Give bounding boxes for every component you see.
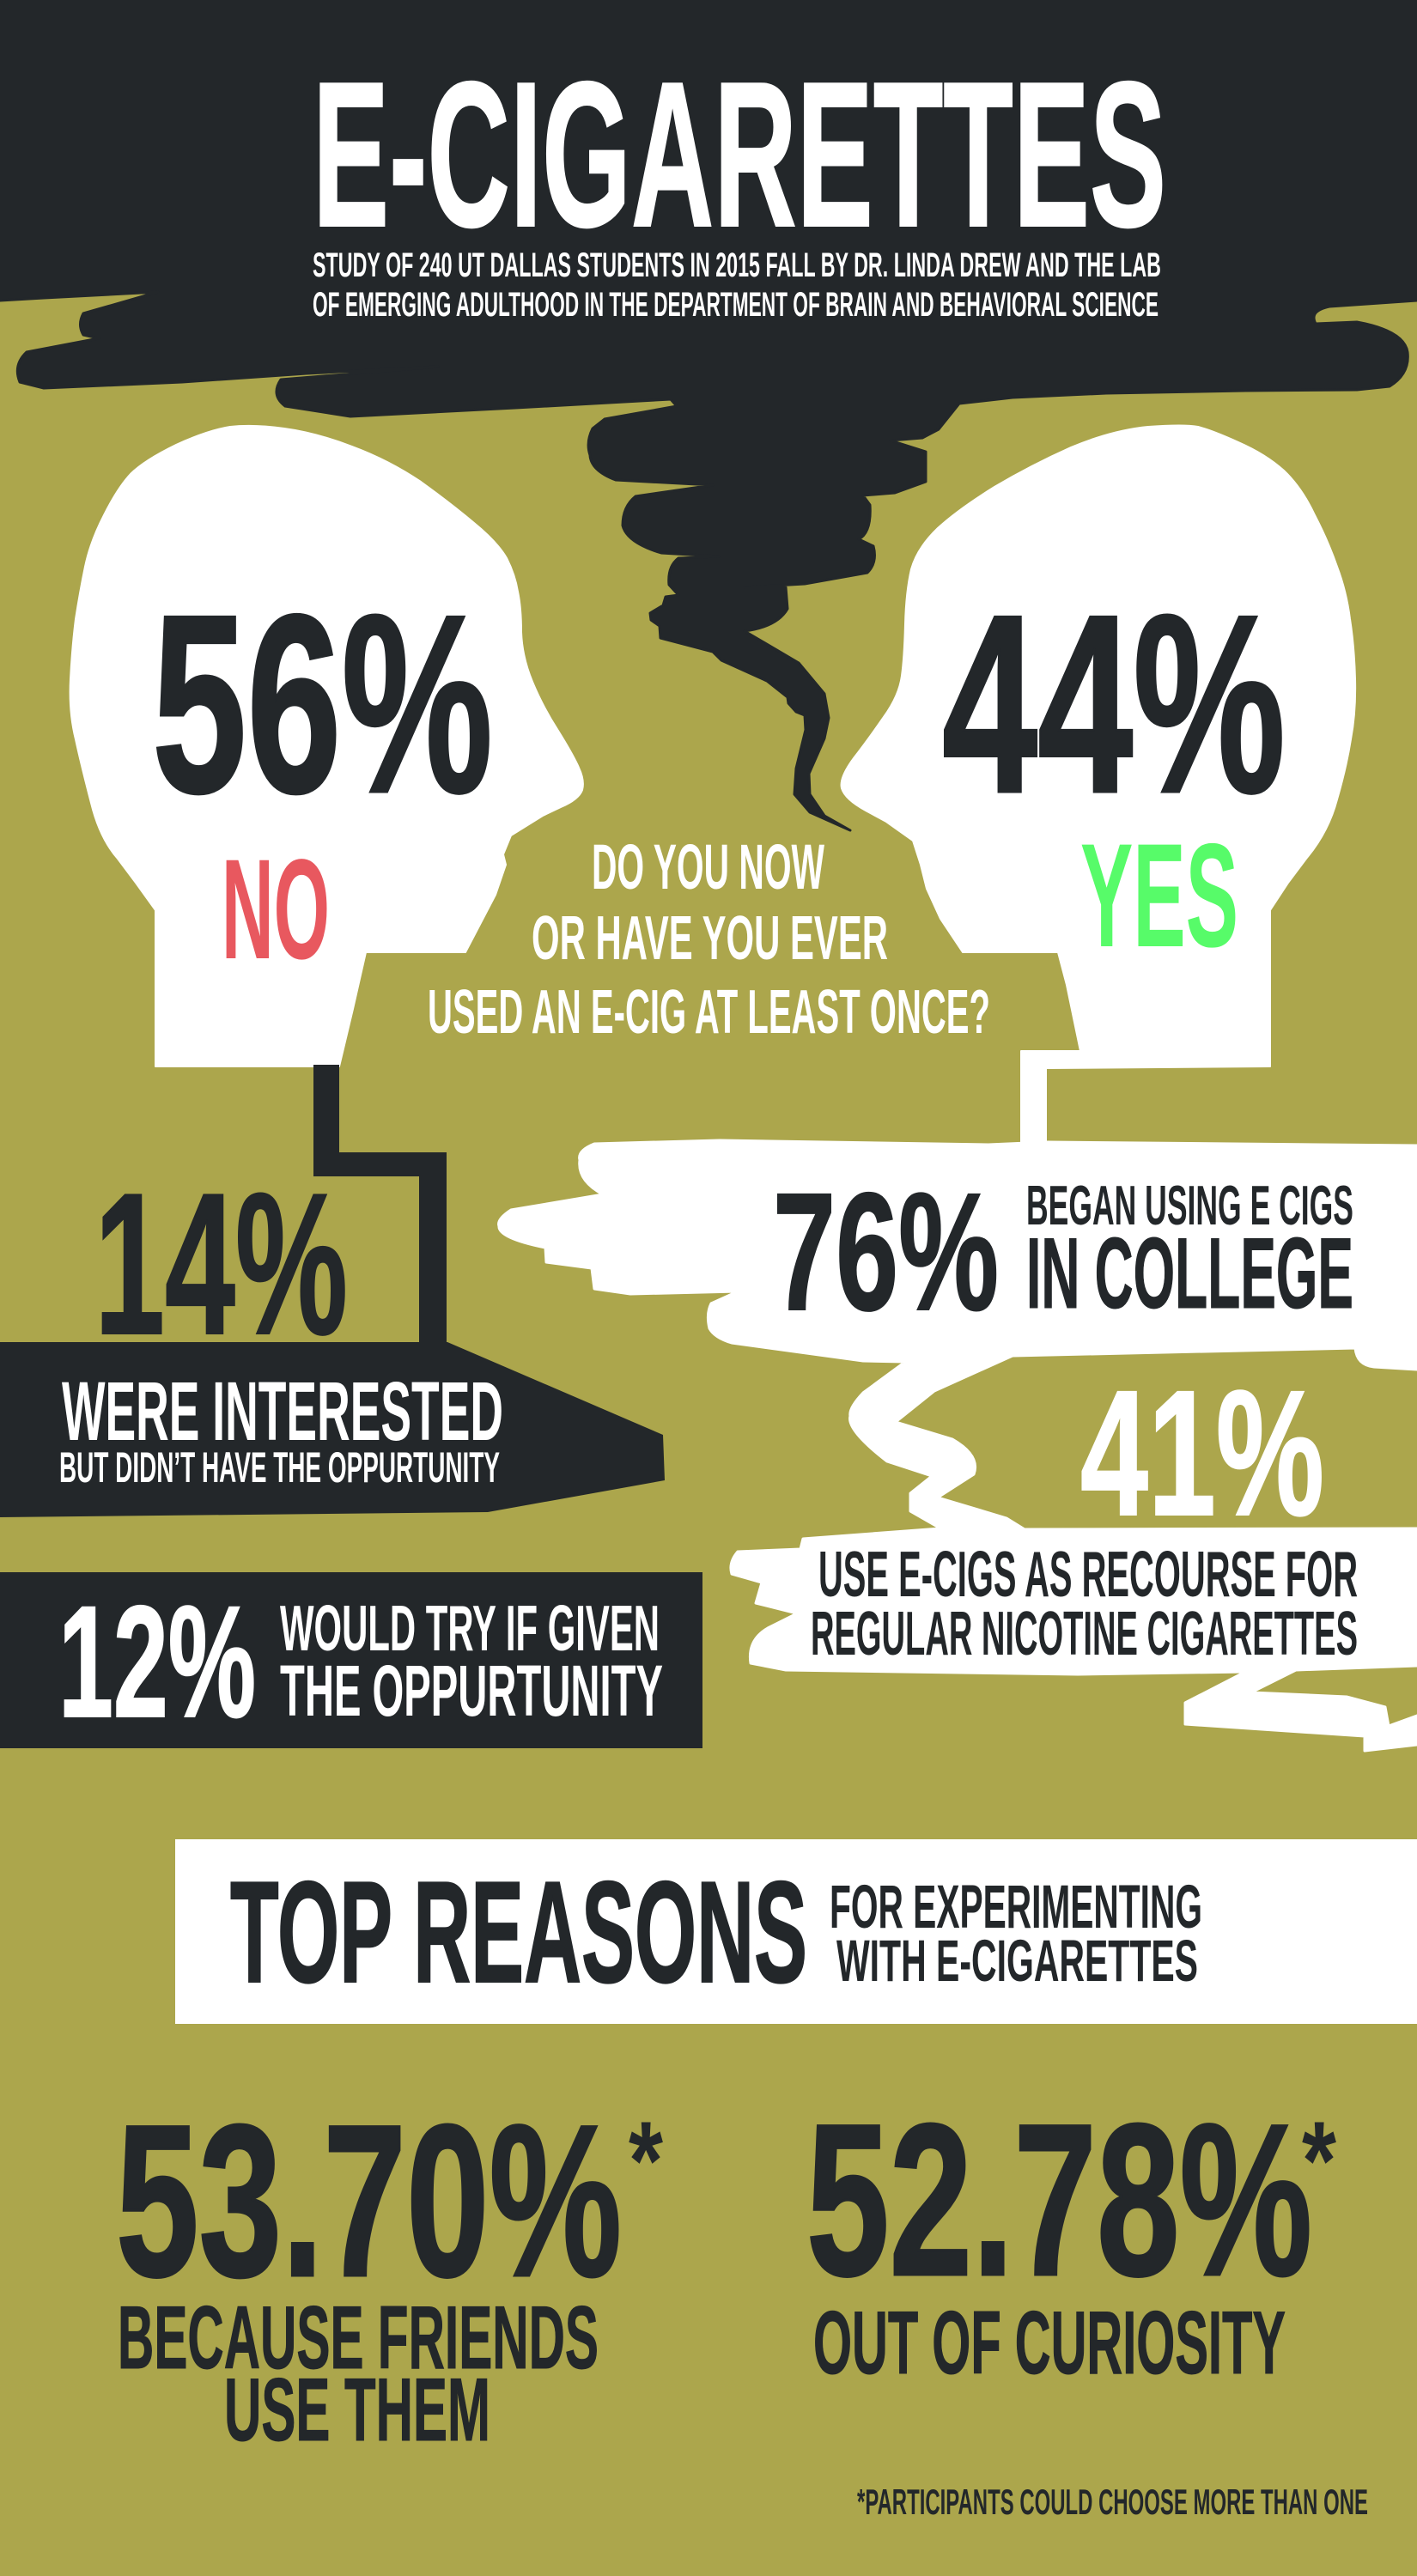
white smoke scribble (499, 1140, 1417, 1751)
panel text (59, 1364, 503, 1492)
panel text (280, 1592, 663, 1731)
began using text (1026, 1174, 1353, 1329)
14% statistic: 14% (94, 1151, 348, 1376)
panel text: WERE INTERESTED (62, 1364, 503, 1458)
12% statistic: 12% (58, 1574, 256, 1751)
panel shape (0, 1342, 665, 1517)
banner (175, 1839, 1417, 2024)
connector: left head to interested panel (313, 1065, 447, 1348)
yes label: YES (1080, 813, 1238, 978)
friends caption (118, 2288, 599, 2460)
right head silhouette and connector: yes (842, 426, 1355, 1145)
53.70% statistic: 53.70% (116, 2081, 622, 2322)
panel: would try (0, 1572, 702, 1751)
question: OR HAVE YOU EVER (532, 904, 888, 973)
banner subheading (830, 1874, 1202, 1994)
76% statistic: 76% (773, 1158, 999, 1346)
question: USED AN E-CIG AT LEAST ONCE? (428, 978, 990, 1047)
panel text: WOULD TRY IF GIVEN (280, 1592, 660, 1664)
panel: interested (0, 1342, 665, 1517)
recourse text (811, 1538, 1358, 1668)
no label: NO (222, 830, 330, 989)
friends caption: USE THEM (224, 2360, 490, 2460)
asterisk: * (629, 2098, 663, 2223)
panel text: BUT DIDN’T HAVE THE OPPURTUNITY (59, 1443, 500, 1492)
question (428, 831, 990, 1047)
left head silhouette: no (70, 426, 583, 1066)
panel box (0, 1572, 702, 1748)
panel: top reasons (175, 1839, 1417, 2024)
banner heading: TOP REASONS (230, 1851, 807, 2013)
header smoke scribble (0, 0, 1417, 830)
56% statistic: 56% (152, 562, 493, 846)
panel text: THE OPPURTUNITY (280, 1650, 663, 1731)
question: DO YOU NOW (592, 831, 824, 902)
friends caption: BECAUSE FRIENDS (118, 2288, 599, 2388)
asterisk: * (1302, 2098, 1336, 2223)
subtitle (313, 246, 1161, 324)
